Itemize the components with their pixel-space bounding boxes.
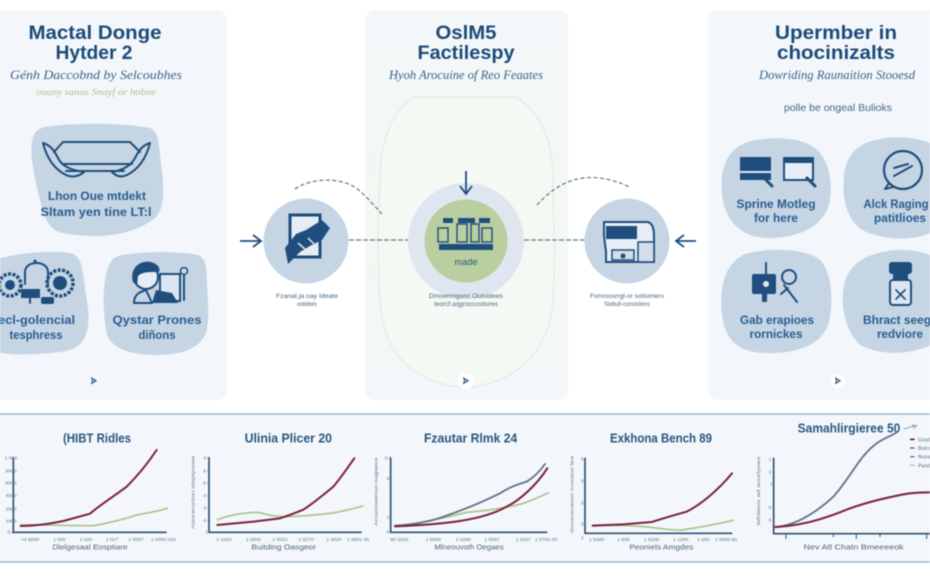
chart: Exkhona Bench 89: 1 506	[617, 537, 630, 543]
left node caption: Fzanat.ja oay Ideate	[276, 293, 338, 300]
connector: left curved dashed arrow	[295, 180, 382, 214]
chat card label: patitlioes	[874, 211, 926, 225]
right panel note: polle be ongeal Bulioks	[784, 102, 892, 114]
right panel title	[775, 23, 897, 64]
node: right	[584, 198, 670, 308]
chart: Fzautar Rlmk 24	[374, 431, 557, 552]
card: person	[104, 252, 208, 355]
chart: Exkhona Bench 89: 0	[581, 479, 584, 485]
card: screens	[722, 138, 831, 238]
page marker	[831, 374, 845, 388]
chart: Fzautar Rlmk 24: Mlneouvsth Oegaes	[434, 543, 504, 552]
chart: Exkhona Bench 89: Exkhona Bench 89	[610, 431, 712, 445]
arrow: into left node	[240, 235, 261, 247]
node: left	[264, 198, 348, 308]
chart: Exkhona Bench 89: 5	[581, 457, 584, 463]
icon: two screens	[740, 157, 815, 186]
chart: Samshlirgieree 50: Nev Atl Chatn Bmeeeeok	[804, 543, 904, 552]
card: bottle	[843, 250, 930, 353]
lock card label: rornickes	[750, 327, 803, 341]
chart: Ulinia Plicer 20: 1	[205, 530, 208, 536]
chart: Fzautar Rlmk 24: 3 0	[385, 455, 392, 461]
chart: Fzautar Rlmk 24: 0	[387, 530, 390, 536]
right panel title: chocinizalts	[777, 43, 895, 64]
icon: gears and monitor	[0, 260, 73, 304]
chart: Fzautar Rlmk 24: 1 0207	[516, 537, 531, 543]
chart: HIBT Ridles: 1 000	[5, 455, 17, 461]
chart: Ulinia Plicer 20: 4 0	[203, 493, 210, 499]
centre node label: made	[454, 257, 478, 267]
icon: padlock and key	[752, 263, 797, 302]
chart: Exkhona Bench 89: 1 5480	[589, 537, 605, 543]
chart: Ulinia Plicer 20: 3 0	[203, 455, 210, 461]
right panel subtitle: Dowriding Raunaition Stooesd	[758, 67, 915, 82]
chart: Exkhona Bench 89: Gonsnerstoon Arootion lice	[569, 455, 575, 533]
chart: Ulinia Plicer 20	[191, 431, 369, 552]
panel: right	[708, 10, 930, 400]
right node caption: Fsmroosrrgl-or sotisimers	[590, 293, 665, 300]
node: centre	[408, 171, 524, 308]
chart: Ulinia Plicer 20: 4 0	[203, 518, 210, 524]
chart: HIBT Ridles: 1 000	[53, 537, 66, 543]
chart: Ulinia Plicer 20: 8 0	[203, 480, 210, 486]
chart: Ulinia Plicer 20: 1 1020	[216, 537, 232, 543]
gears card label: tesphress	[10, 328, 63, 342]
screens card label: Sprine Motleg	[736, 197, 816, 211]
chart: Exkhona Bench 89	[569, 431, 737, 552]
bottle card label: redviore	[877, 327, 923, 341]
chart: Fzautar Rlmk 24: 1	[387, 514, 390, 520]
chart: HIBT Ridles: 0.0	[8, 530, 15, 536]
chart: Ulinia Plicer 20: 3 0	[203, 506, 210, 512]
right node caption: Sixbull-consistens	[604, 301, 651, 308]
centre panel subtitle: Hyoh Arocuine of Reo Feaates	[388, 67, 543, 82]
screens card label: for here	[754, 211, 798, 225]
chart: Samshlirgieree 50: 0	[769, 505, 772, 511]
chart: HIBT Ridles: 1 0000 020	[151, 537, 176, 543]
chart: Samshlirgieree 50: Whiteos ad anorlyoes	[756, 456, 762, 525]
chart: Exkhona Bench 89: 0	[581, 500, 584, 506]
chart: Ulinia Plicer 20: 1 4020	[326, 537, 342, 543]
bottle card label: Bhract seeg	[863, 313, 930, 327]
card: gears	[0, 252, 89, 354]
person card label: Qystar Prones	[112, 313, 202, 327]
page marker: ᗌ	[91, 376, 98, 386]
gears card label	[0, 313, 75, 342]
lock card label	[740, 313, 814, 341]
chart: Ulinia Plicer 20: 1 8801 00	[347, 537, 369, 543]
screens card label	[736, 197, 816, 225]
hands card label	[40, 189, 152, 219]
card: chat	[843, 137, 930, 238]
connector: right curved dashed arrow	[537, 177, 629, 205]
chart: Exkhona Bench 89: 1 5000 80	[715, 537, 737, 543]
chart: HIBT Ridles: 1 027	[106, 537, 118, 543]
chart: HIBT Ridles: >4 8000	[21, 537, 39, 543]
centre panel title: Factilespy	[418, 43, 515, 64]
chart: Fzautar Rlmk 24: 5	[387, 476, 390, 482]
chart: Ulinia Plicer 20: Ulinia Plicer 20	[245, 431, 332, 445]
centre node caption: Ieorcf.arjgroccostiores	[434, 301, 499, 308]
person card label	[112, 313, 202, 342]
hands card label: Lhon Oue mtdekt	[48, 189, 146, 203]
icon: chat circle	[884, 151, 922, 189]
centre node caption	[429, 293, 504, 308]
chat card label	[864, 197, 928, 225]
page marker	[458, 373, 474, 389]
centre node caption: Dmoerrngsnc Ouisidees	[429, 293, 504, 300]
lock card label: Gab erapioes	[740, 313, 814, 327]
left panel green note: ouany sanas Snayf or hobne	[36, 87, 156, 98]
chart: Fzautar Rlmk 24: 1 0290	[456, 537, 471, 543]
chart: Ulinia Plicer 20: 1 0021	[272, 537, 288, 543]
chart: Samshlirgieree 50	[756, 421, 930, 552]
chart legend: Grad	[918, 437, 930, 443]
panel: centre	[365, 10, 568, 400]
chart: Exkhona Bench 89: 1	[581, 535, 584, 541]
chart: Fzautar Rlmk 24: 80 2020	[390, 537, 409, 543]
centre panel title	[418, 23, 515, 64]
left panel subtitle: Génh Daccobnd by Selcoubhes	[10, 67, 182, 82]
icon: document and tool	[285, 215, 330, 264]
chart: Fzautar Rlmk 24: 1 0700 20	[535, 537, 557, 543]
chart: Ulinia Plicer 20: 1 0270	[298, 537, 314, 543]
connector: dashed horizontal lines	[349, 239, 586, 241]
chart: Exkhona Bench 89: Peoniels Amgdes	[629, 543, 694, 552]
chart: Exkhona Bench 89: 1 200	[697, 537, 710, 543]
bottle card label	[863, 313, 930, 341]
chart legend	[910, 437, 930, 469]
chart: Exkhona Bench 89: 1 1200	[673, 537, 689, 543]
panel: charts band	[0, 414, 930, 562]
card: lock and key	[721, 250, 831, 353]
chart: Samshlirgieree 50: Samahlirgieree 50	[798, 421, 900, 435]
centre panel title: OslM5	[436, 23, 497, 44]
chart: Samshlirgieree 50: 5	[769, 518, 772, 524]
chart: Fzautar Rlmk 24: Fzautar Rlmk 24	[424, 431, 517, 445]
chart: Samshlirgieree 50: 2	[769, 469, 772, 475]
card: hands	[31, 124, 163, 236]
chart: Ulinia Plicer 20: Aoncerurtion oloptynnes	[191, 455, 197, 529]
chart: Fzautar Rlmk 24: 1 0097	[484, 537, 500, 543]
chart: Ulinia Plicer 20: Buitding Oasgeor	[251, 543, 316, 552]
chart: Samshlirgieree 50: 1	[770, 481, 773, 487]
hands card label: Sltam yen tine LT:l	[40, 205, 152, 219]
chart: HIBT Ridles: 6000	[5, 480, 17, 486]
left panel title: Mactal Donge	[28, 23, 162, 44]
page marker: ᗌ	[463, 376, 470, 386]
icon: bottle	[889, 262, 912, 305]
icon: person at screen	[132, 262, 188, 303]
left panel title: Hytder 2	[56, 43, 132, 64]
chart: HIBT Ridles	[5, 431, 176, 552]
right node caption	[590, 293, 665, 308]
icon: factory machinery	[438, 218, 493, 250]
chart: Ulinia Plicer 20: 1 0000	[246, 537, 261, 543]
icon: computer machine	[604, 222, 654, 262]
chart: HIBT Ridles: 1 0037	[128, 537, 144, 543]
left panel title	[28, 23, 162, 64]
chart: Exkhona Bench 89: 1 5200	[644, 537, 660, 543]
page marker: ᗌ	[835, 376, 842, 386]
arrow: down into centre node	[460, 171, 472, 194]
right panel title: Upermber in	[775, 23, 897, 44]
left node caption	[276, 293, 338, 308]
chart: Fzautar Rlmk 24: Accacrreatmuo ouigtance	[374, 457, 380, 526]
chart: HIBT Ridles: 4000	[5, 493, 17, 499]
chart: HIBT Ridles: 2000	[5, 506, 17, 512]
chart: Ulinia Plicer 20: 5 0	[203, 468, 210, 474]
left node caption: ootidees	[297, 301, 318, 308]
arrow: into right node	[676, 235, 696, 247]
icon: hands holding tray	[43, 142, 150, 176]
person card label: diñons	[138, 328, 176, 342]
chart: HIBT Ridles: 1000	[5, 519, 17, 525]
panel: left	[0, 10, 227, 400]
chart: HIBT Ridles: 8000	[5, 468, 17, 474]
chart: Samshlirgieree 50: 1	[769, 457, 772, 463]
chart: HIBT Ridles: 1 020	[80, 537, 92, 543]
chart: HIBT Ridles: Dlelgesaal Eosptiare	[52, 543, 128, 552]
chart: HIBT Ridles: (HIBT Ridles	[63, 431, 131, 445]
centre outline shape	[378, 97, 554, 388]
chart: Exkhona Bench 89: 0	[581, 521, 584, 527]
chart: Fzautar Rlmk 24: 1 6000	[426, 537, 441, 543]
